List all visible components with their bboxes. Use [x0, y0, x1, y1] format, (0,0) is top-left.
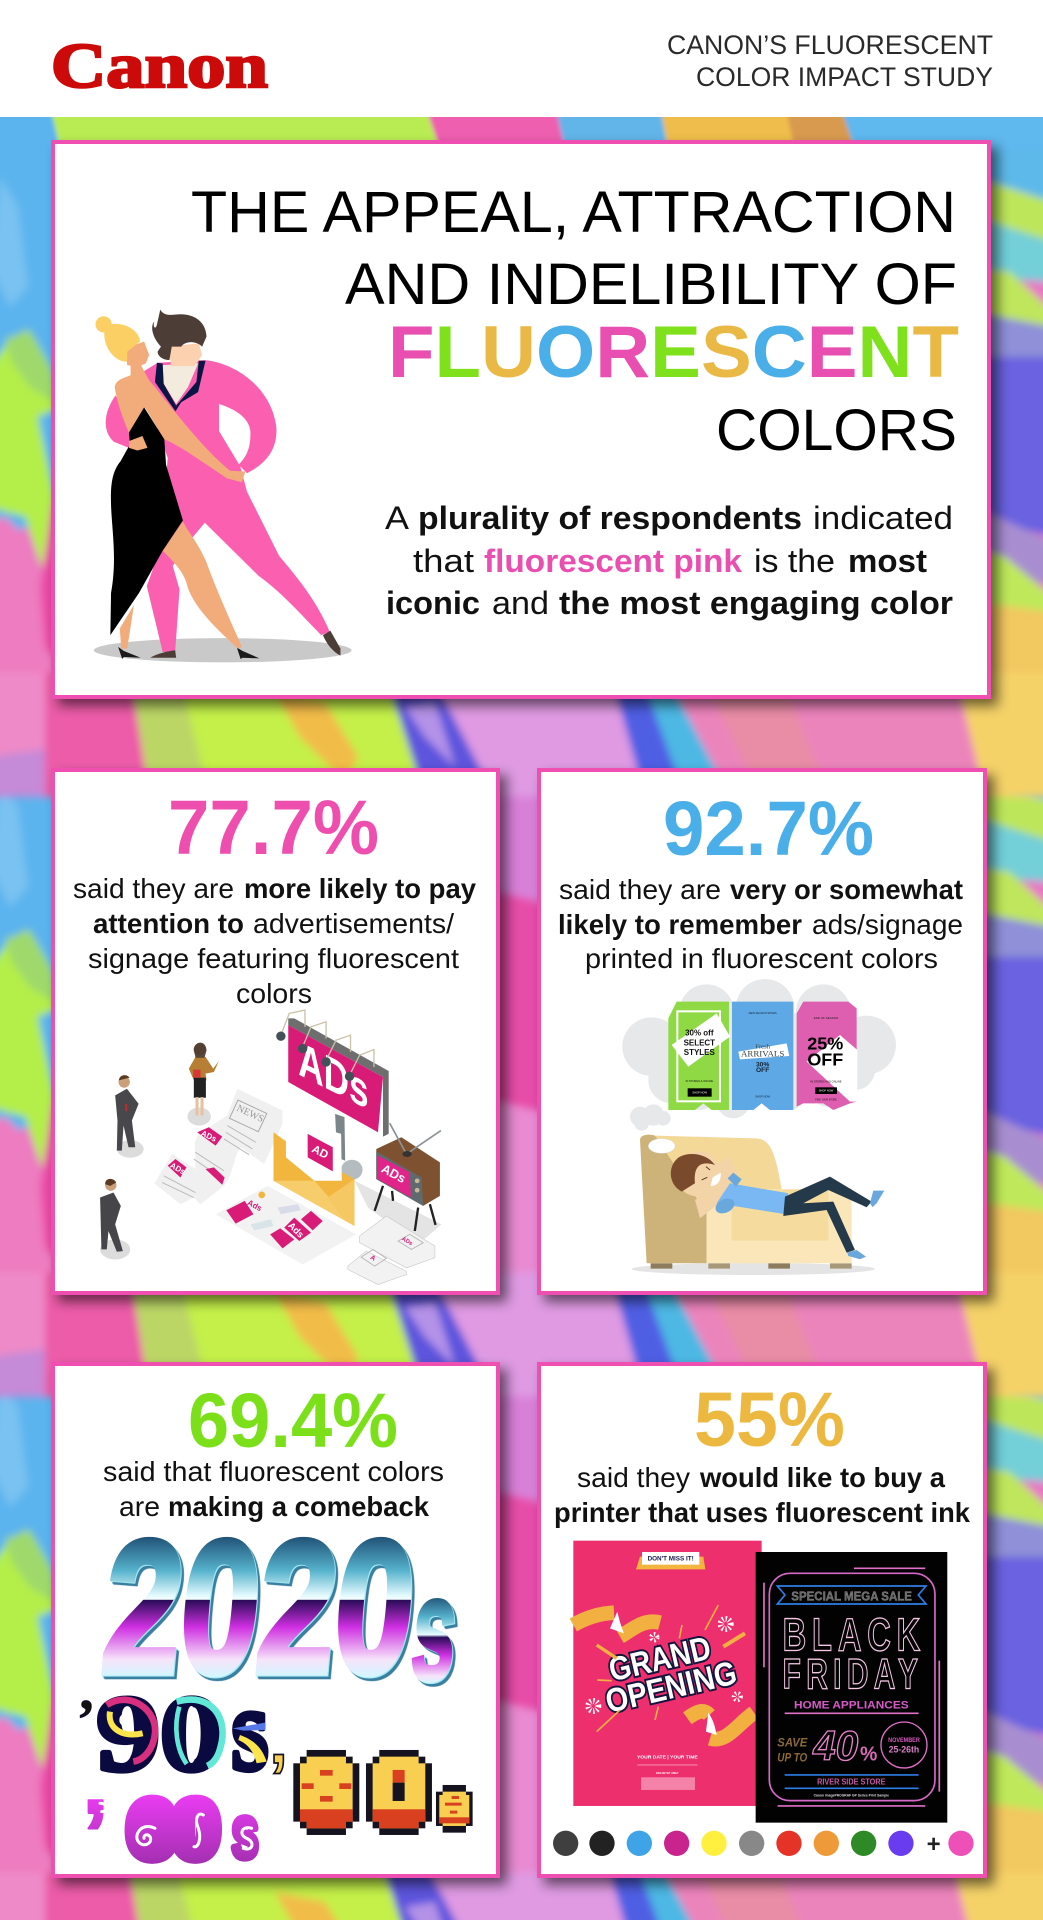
poster: black friday neon: UP TO	[777, 1750, 808, 1764]
description: colors	[236, 978, 312, 1009]
description: attention to	[93, 908, 244, 939]
stacked newspapers: ADs	[400, 1236, 413, 1247]
presenter woman	[189, 1043, 219, 1116]
title	[191, 180, 959, 463]
poster: black friday neon: FRIDAY	[783, 1650, 923, 1698]
poster: black friday neon: SPECIAL MEGA SALE	[791, 1590, 912, 1604]
poster: grand opening: DOLOR SIT AMET	[656, 1771, 679, 1775]
woman's far leg	[120, 605, 134, 649]
poster: grand opening	[573, 1541, 762, 1806]
panel: 77.7% attention	[53, 770, 507, 1302]
hero text block: most	[848, 543, 927, 579]
ink swatches: +	[927, 1831, 941, 1858]
banner: pink: OFF	[807, 1050, 843, 1070]
statistic: 77.7%	[168, 785, 379, 871]
newspaper scroll: ADs	[200, 1129, 218, 1144]
woman's near leg	[163, 521, 242, 649]
lettering: '90s: ’	[77, 1689, 96, 1751]
banner: pink	[797, 1002, 857, 1110]
banner: green: SELECT	[684, 1038, 715, 1047]
banner: pink: FIND YOUR STORE	[815, 1100, 837, 1102]
poster: black friday neon: SAVE	[777, 1736, 808, 1750]
poster: black friday neon: NOVEMBER	[888, 1738, 920, 1744]
poster: black friday neon: RIVER SIDE STORE	[817, 1778, 886, 1787]
lettering: '90s: 90	[97, 1674, 223, 1794]
hero text block: fluorescent pink	[484, 543, 742, 579]
TV set: ADs	[379, 1161, 408, 1186]
banner: green: SHOP NOW	[692, 1091, 707, 1095]
black dress	[110, 407, 183, 635]
lettering: '80s: 8	[312, 1760, 341, 1819]
illustration: decades lettering	[77, 1501, 473, 1892]
lettering: 2020s: 2020	[96, 1501, 423, 1712]
ink swatches	[553, 1831, 974, 1858]
hero text block	[385, 500, 953, 621]
description: said that fluorescent colors	[103, 1456, 444, 1487]
banner: pink: SHOP NOW	[819, 1089, 834, 1093]
banner: blue: Fresh	[755, 1044, 771, 1051]
poster: grand opening: OPENING	[602, 1655, 740, 1721]
description: printer that uses fluorescent ink	[554, 1497, 970, 1528]
illustration: advertising isometric scene	[100, 1010, 442, 1285]
lettering: '60s	[82, 1780, 259, 1892]
lettering: '60s: s	[231, 1791, 259, 1873]
hero text block: is the	[754, 543, 835, 579]
banner: pink: IN STORES AND ONLINE	[810, 1080, 842, 1084]
TV set	[375, 1123, 441, 1231]
poster: black friday neon: HOME APPLIANCES	[794, 1700, 909, 1712]
panel: 55% printer	[539, 1364, 994, 1885]
man standing	[115, 1075, 139, 1151]
logo: Canon: Canon	[51, 30, 268, 101]
lettering: '90s	[77, 1662, 269, 1795]
banner: pink: END OF SEASON	[814, 1016, 838, 1020]
poster: grand opening: YOUR DATE | YOUR TIME	[637, 1755, 698, 1761]
lettering: '80s: 0	[384, 1760, 414, 1819]
woman's back and arm	[115, 363, 245, 482]
banner: blue: SHOP NOW	[755, 1094, 770, 1098]
description: said they are	[73, 873, 234, 904]
lettering: '90s: s	[231, 1662, 269, 1795]
man's shoes	[150, 650, 176, 658]
banner: blue: ARRIVALS	[741, 1050, 785, 1059]
lettering: 2020s: s	[406, 1548, 464, 1711]
man's head	[168, 343, 202, 366]
description: printed in fluorescent colors	[585, 943, 938, 974]
description: likely to remember	[558, 909, 802, 940]
description	[73, 873, 476, 1009]
title: AND INDELIBILITY OF	[345, 252, 957, 317]
man from behind	[100, 1179, 123, 1252]
poster: black friday neon	[756, 1552, 947, 1823]
envelope with ad letter	[274, 1117, 355, 1226]
sofa	[632, 1135, 875, 1275]
description: said they are	[559, 874, 721, 905]
hero text block: indicated	[813, 500, 953, 536]
sleeping man	[671, 1151, 884, 1259]
newspaper scroll: ADs	[168, 1161, 187, 1177]
title: COLORS	[716, 398, 957, 463]
woman's head and hair	[126, 342, 149, 367]
lettering: '80s: ’	[269, 1742, 288, 1816]
description: are	[119, 1491, 160, 1522]
statistic: 55%	[694, 1377, 845, 1463]
newspaper scroll: NEWS	[235, 1103, 265, 1125]
header: study title: CANON’S FLUORESCENT	[667, 30, 993, 60]
billboard	[276, 1010, 389, 1180]
lettering: '60s: 60	[129, 1788, 218, 1873]
panel: 69.4% comeback	[53, 1364, 507, 1892]
man's suit	[139, 360, 330, 652]
stacked newspapers	[348, 1216, 435, 1285]
thought cloud	[622, 979, 896, 1131]
description: very or somewhat	[730, 874, 963, 905]
poster: black friday neon: %	[860, 1743, 877, 1766]
header band	[0, 0, 1043, 117]
panel: hero	[53, 142, 998, 706]
posters and ink swatches	[553, 1541, 974, 1858]
envelope with ad letter: AD	[310, 1143, 330, 1162]
panel: 92.7% remember	[539, 770, 994, 1302]
poster: black friday neon: Canon imagePROGRAF GP Series Print Sample	[814, 1794, 889, 1798]
newspaper scroll	[154, 1089, 283, 1204]
title: THE APPEAL, ATTRACTION	[191, 180, 956, 245]
description: would like to buy a	[699, 1462, 945, 1493]
poster: black friday neon: 40	[812, 1722, 858, 1769]
description	[103, 1456, 444, 1522]
open brochure	[216, 1186, 356, 1264]
poster: grand opening: DON'T MISS IT!	[648, 1555, 694, 1562]
banner: green: IN STORES & ONLINE	[686, 1079, 713, 1083]
description: more likely to pay	[244, 873, 476, 904]
description: advertisements/	[253, 908, 454, 939]
hero text block: the most engaging color	[559, 585, 953, 621]
statistic: 92.7%	[663, 786, 874, 872]
lettering: '80s: s	[445, 1782, 465, 1823]
hero text block: plurality of respondents	[418, 500, 802, 536]
billboard: ADs	[298, 1030, 369, 1120]
statistic: 69.4%	[188, 1378, 398, 1464]
description: signage featuring fluorescent	[88, 943, 459, 974]
banner: green: 30% off	[685, 1029, 714, 1038]
banner: green	[668, 1002, 730, 1110]
illustration: man dreaming of ads on a sofa	[622, 979, 896, 1275]
hero text block: and	[492, 585, 549, 621]
poster: black friday neon: 25-26th	[889, 1745, 919, 1755]
illustration: dancing couple	[94, 309, 352, 662]
hero text block: iconic	[386, 585, 480, 621]
banner: blue: OFF	[756, 1067, 769, 1074]
header: study title: COLOR IMPACT STUDY	[696, 62, 993, 92]
banner: blue	[732, 1002, 793, 1110]
description	[554, 1462, 970, 1528]
small cloud	[648, 1139, 675, 1153]
banner: green: STYLES	[684, 1048, 716, 1057]
hero text block: that	[413, 543, 474, 579]
poster: black friday neon: BLACK	[783, 1609, 926, 1661]
shirt and collar	[163, 363, 198, 404]
hero text block: A	[385, 500, 410, 536]
open brochure: Ads	[286, 1220, 306, 1240]
woman's shoes	[118, 647, 141, 659]
lettering: '80s	[269, 1742, 473, 1835]
poster: grand opening: GRAND	[605, 1630, 714, 1689]
banner: blue: NEW SEASON SHOES	[749, 1011, 777, 1015]
floor shadows	[117, 1140, 144, 1158]
hand on back	[129, 436, 147, 451]
description: said they	[577, 1462, 690, 1493]
banner: blue: 30%	[756, 1062, 769, 1069]
stacked newspapers: A	[369, 1254, 377, 1263]
description	[558, 874, 963, 974]
banner: pink: 25%	[807, 1033, 843, 1053]
lettering: '60s: ’	[82, 1780, 109, 1892]
title: FLUORESCENT	[388, 312, 959, 393]
header: study title	[667, 30, 993, 92]
man's far arm	[106, 396, 137, 449]
open brochure: Ads	[246, 1198, 264, 1213]
description: ads/signage	[812, 909, 963, 940]
description: making a comeback	[168, 1491, 429, 1522]
